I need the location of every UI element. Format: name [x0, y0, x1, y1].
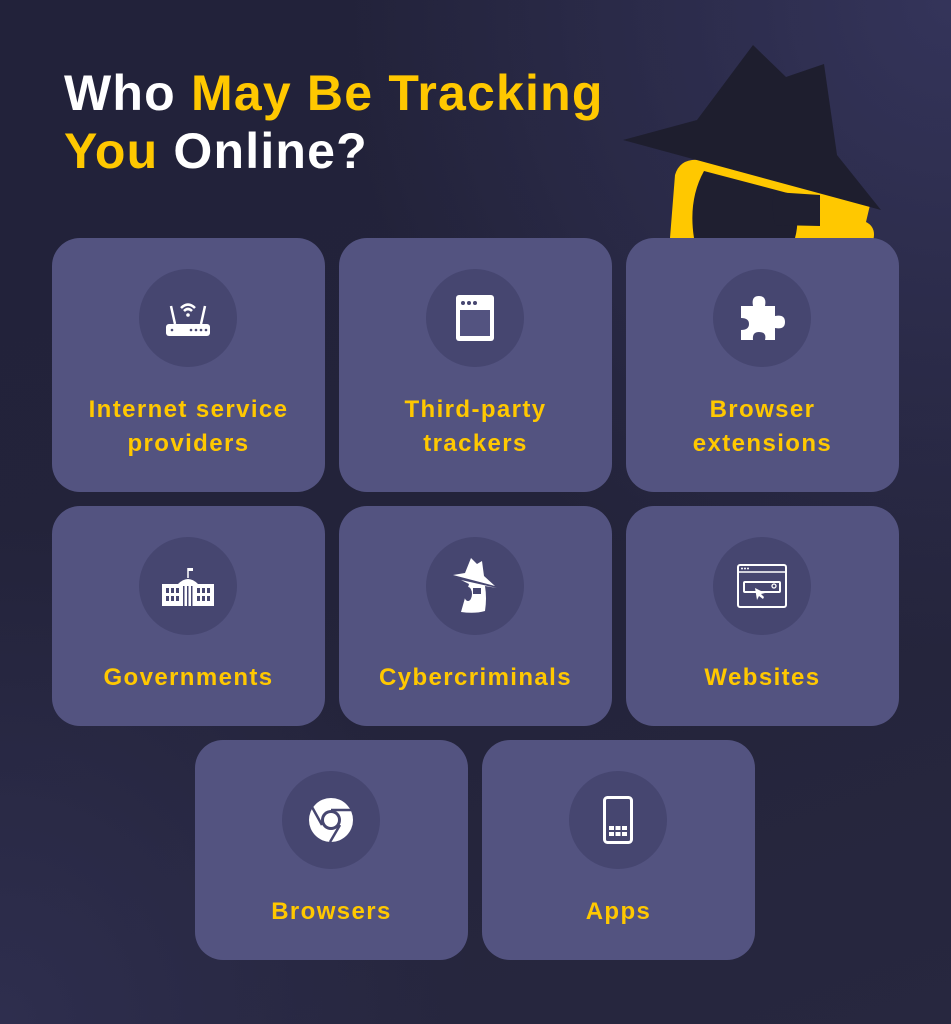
label: Apps [586, 898, 651, 925]
title: You Online? [64, 123, 368, 179]
card: apps [482, 740, 755, 960]
card: websites [626, 506, 899, 726]
label: Websites [704, 664, 821, 691]
icon: router [139, 269, 237, 367]
label: Governments [103, 664, 274, 691]
icon: chrome logo [282, 771, 380, 869]
label: extensions [693, 430, 832, 457]
label [404, 396, 547, 457]
icon: browser window [426, 269, 524, 367]
label: Internet service [89, 396, 288, 423]
label: Browser [710, 396, 815, 423]
card: cybercriminals [339, 506, 612, 726]
label: trackers [423, 430, 528, 457]
spy character illustration [624, 45, 881, 238]
label: Cybercriminals [379, 664, 572, 691]
title [64, 65, 604, 179]
card: browsers [195, 740, 468, 960]
icon: spy [426, 537, 524, 635]
label [693, 396, 832, 457]
icon: government building [139, 537, 237, 635]
label [89, 396, 288, 457]
card: browser extensions [626, 238, 899, 492]
icon: puzzle piece [713, 269, 811, 367]
card: governments [52, 506, 325, 726]
icon: website search [713, 537, 811, 635]
card: ISP [52, 238, 325, 492]
icon: phone [569, 771, 667, 869]
card: third-party trackers [339, 238, 612, 492]
label: Browsers [271, 898, 392, 925]
label: Third-party [404, 396, 547, 423]
label: providers [128, 430, 249, 457]
title: Who May Be Tracking [64, 65, 604, 121]
